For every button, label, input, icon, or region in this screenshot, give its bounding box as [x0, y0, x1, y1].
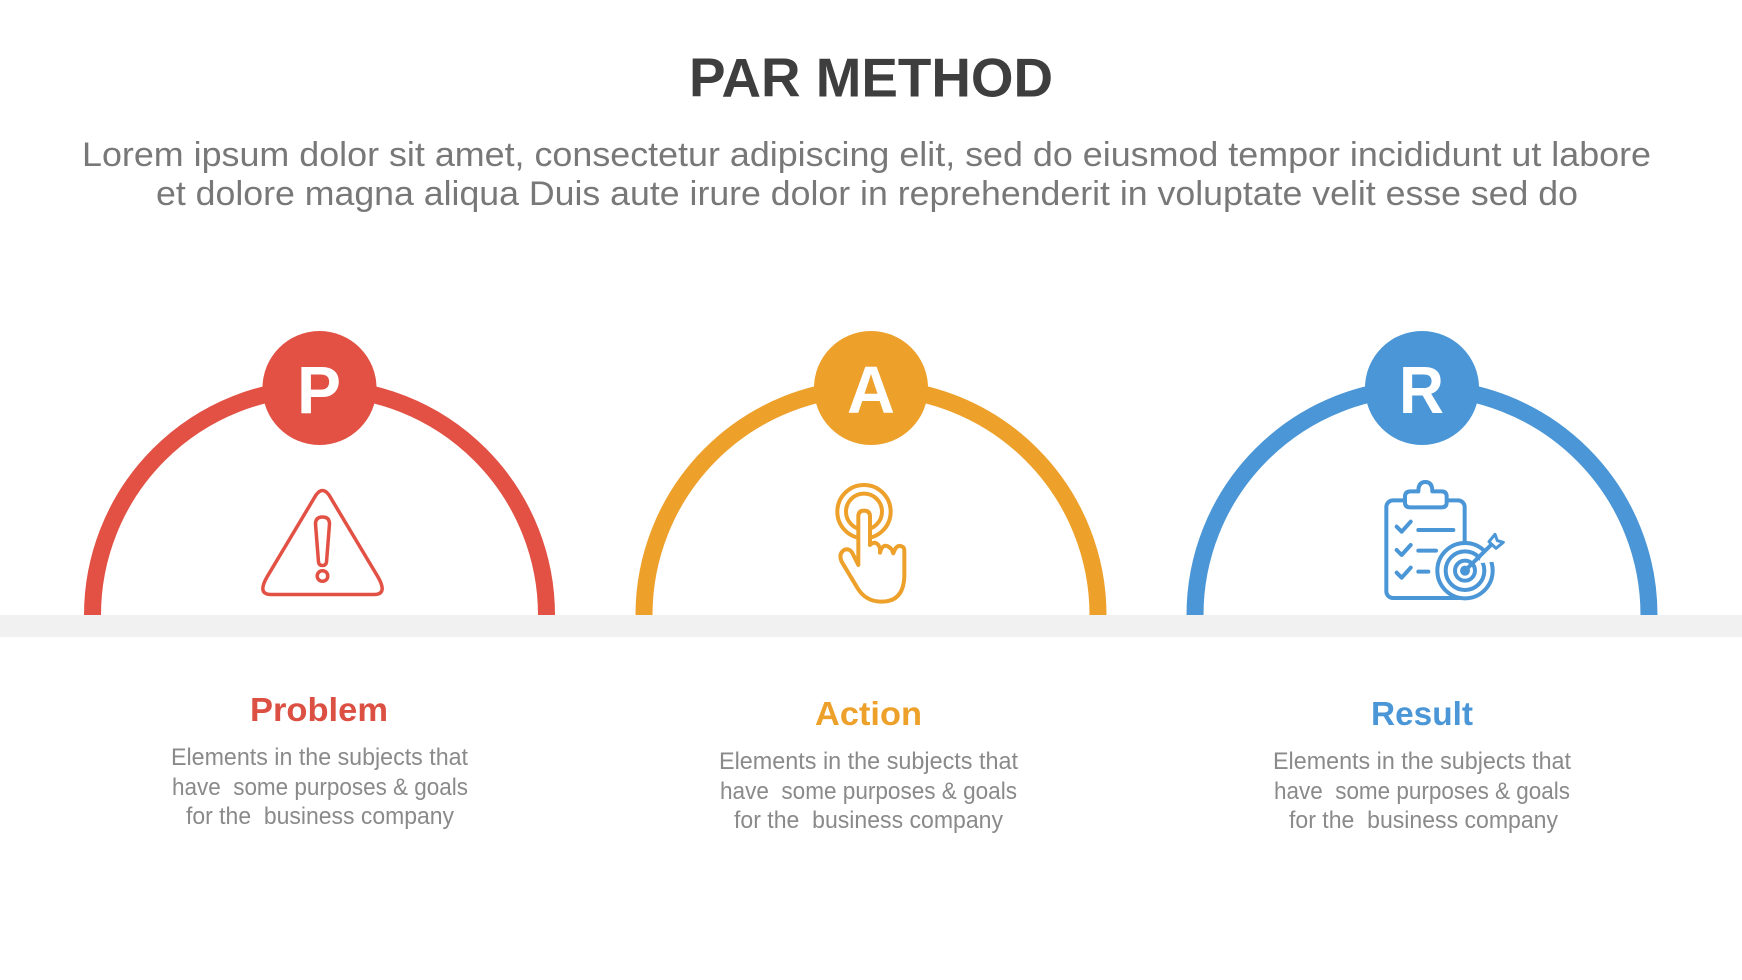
heading: result: Result — [1371, 695, 1473, 732]
heading: action: Action — [815, 695, 922, 732]
description: problem — [171, 744, 468, 830]
description: result: Elements in the subjects that — [1273, 748, 1571, 775]
subtitle text block: Lorem ipsum dolor sit amet, consectetur adipiscing elit, sed do eiusmod tempor incididunt ut labore — [82, 136, 1651, 174]
icon: warning triangle — [263, 490, 382, 594]
description: problem: for the business company — [186, 803, 454, 830]
blue letter badge: R — [1399, 353, 1444, 428]
heading: problem: Problem — [250, 691, 388, 728]
description: problem: have some purposes & goals — [172, 774, 468, 801]
panel: result — [1195, 331, 1649, 834]
red semicircle arc — [92, 388, 546, 615]
blue semicircle arc — [1195, 388, 1649, 615]
subtitle text block: et dolore magna aliqua Duis aute irure dolor in reprehenderit in voluptate velit esse sed do — [156, 175, 1578, 213]
description: action: have some purposes & goals — [720, 778, 1017, 805]
description: result — [1273, 748, 1571, 834]
icon: pointing hand with touch rings — [837, 485, 904, 602]
red letter badge: P — [297, 353, 341, 428]
panel: problem — [92, 331, 546, 830]
blue letter badge — [1365, 331, 1479, 445]
orange semicircle arc — [644, 388, 1098, 615]
description: action: Elements in the subjects that — [719, 748, 1018, 775]
description: action — [719, 748, 1018, 834]
title: PAR METHOD — [689, 46, 1053, 108]
description: action: for the business company — [734, 807, 1003, 834]
orange letter badge — [814, 331, 928, 445]
orange letter badge: A — [847, 353, 895, 428]
horizontal band — [0, 615, 1742, 637]
description: result: have some purposes & goals — [1274, 778, 1570, 805]
description: result: for the business company — [1289, 807, 1558, 834]
panel: action — [644, 331, 1098, 834]
icon: clipboard checklist with target — [1386, 482, 1503, 598]
description: problem: Elements in the subjects that — [171, 744, 468, 771]
subtitle text block — [82, 136, 1651, 213]
red letter badge — [262, 331, 376, 445]
